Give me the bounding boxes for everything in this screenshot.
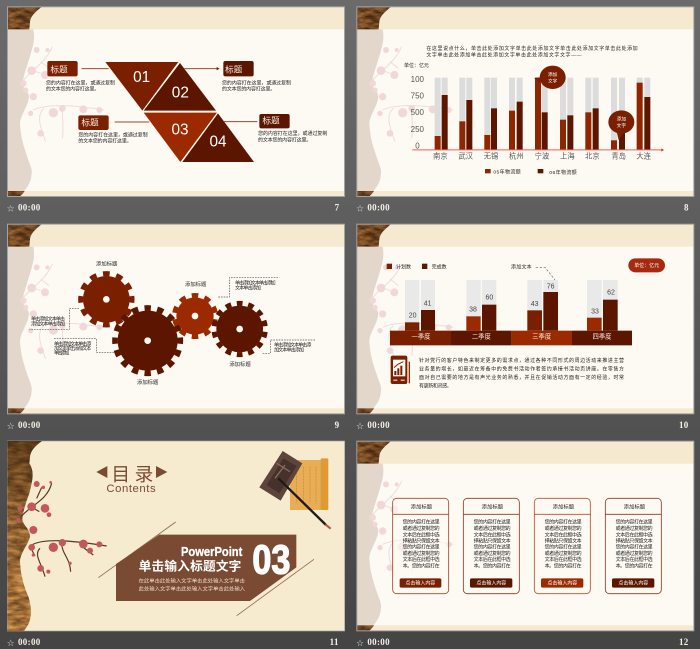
contents heading bbox=[96, 464, 167, 495]
triangle diagram: 02 bbox=[172, 85, 189, 102]
slide 7 footer: 00:00 bbox=[18, 203, 41, 213]
scroll and ink stone bbox=[259, 451, 331, 529]
note right top: 文本单击添加 bbox=[235, 284, 261, 291]
icon: phone with growth chart bbox=[391, 356, 410, 384]
gear titles: 添加标题 bbox=[137, 378, 159, 386]
banner text: 在此单击此处输入文字单击此处输入文字单击 bbox=[139, 577, 245, 585]
bar chart: 无锡 bbox=[484, 152, 498, 161]
callout 3: 标题 bbox=[81, 117, 99, 128]
slide 10 footer bbox=[356, 420, 689, 432]
bar chart: 宁波 bbox=[535, 152, 550, 161]
quarterly bar chart: 33 bbox=[591, 309, 599, 316]
card 2: 您的内容打在这里 bbox=[474, 519, 511, 526]
note left top: 单击添加文本单击 bbox=[31, 316, 65, 323]
slide 12 footer: 12 bbox=[679, 637, 689, 647]
note right bottom: 加文本单击添加 bbox=[274, 346, 304, 353]
quarterly bar chart: 20 bbox=[409, 313, 417, 320]
card 1: 添加标题 bbox=[411, 502, 433, 510]
card 4: 您的内容打在这里 bbox=[616, 544, 653, 551]
quarterly bar chart: 二季度 bbox=[472, 331, 491, 340]
callout bubble: Ningbo bbox=[534, 66, 566, 89]
card 1: 或者通过复制您的 bbox=[403, 550, 440, 557]
slide 11 footer: ☆ bbox=[7, 639, 15, 649]
note right bottom: 单击添加文本单击添 bbox=[274, 342, 311, 349]
quarterly bar chart: 60 bbox=[485, 294, 493, 301]
bar chart: 500 bbox=[411, 108, 425, 117]
chart legend bbox=[485, 169, 577, 176]
plum blossom branch bbox=[16, 481, 107, 577]
slide 9 background bbox=[7, 224, 345, 414]
card 3 bbox=[534, 498, 590, 594]
slide 8 footer bbox=[356, 203, 689, 215]
callout bubble: Ningbo: 添加 bbox=[548, 71, 558, 78]
gear 4 bbox=[214, 303, 265, 355]
unit pill: 单位：亿元 bbox=[634, 262, 659, 269]
callout 2: 的文本您的内容打这里。 bbox=[222, 86, 275, 93]
card 3: 您的内容打在这里 bbox=[545, 519, 582, 526]
card 1: 择粘贴只保留文本 bbox=[403, 538, 440, 545]
gear titles: 添加标题 bbox=[96, 260, 118, 268]
slide 7: numbered triangles bbox=[7, 7, 345, 215]
card 4: 您的内容打在这里 bbox=[616, 519, 653, 526]
quarterly bar chart: 38 bbox=[469, 307, 477, 314]
slide 12 footer: 00:00 bbox=[367, 637, 390, 647]
slide 8: bar chart bbox=[356, 7, 694, 215]
callout 2: 您的内容打在这里，或通过复制 bbox=[222, 79, 291, 86]
note right top bbox=[218, 278, 279, 297]
bar chart: 250 bbox=[411, 125, 425, 134]
callout bubble: Qingdao: 文字 bbox=[617, 122, 626, 129]
note left bottom: 单击添加文本单击添 bbox=[54, 340, 91, 347]
bar chart: 青岛 bbox=[611, 152, 626, 161]
slide 8 footer: 8 bbox=[684, 203, 689, 213]
quarterly bar chart: 一季度 bbox=[412, 331, 431, 340]
card 4: 本。您的内容打在 bbox=[616, 562, 653, 569]
callout 4: 您的内容打在这里，或通过复制 bbox=[258, 130, 327, 137]
card 4: 文本后在此框中选 bbox=[616, 556, 653, 563]
slide 11: contents bbox=[7, 441, 345, 649]
bar chart: 大连 bbox=[636, 152, 652, 161]
slide 7 footer bbox=[7, 203, 340, 215]
triangle diagram: 04 bbox=[209, 134, 227, 151]
callout 3: 的文本您的内容打这里。 bbox=[78, 138, 132, 145]
quarterly bar chart: 41 bbox=[424, 300, 432, 307]
note left top bbox=[29, 309, 79, 329]
callout 2: 标题 bbox=[225, 63, 243, 74]
annotation bbox=[511, 264, 555, 280]
triangle diagram bbox=[105, 62, 254, 162]
card 1: 或者通过复制您的 bbox=[403, 525, 440, 532]
slide 10: quarterly bars bbox=[356, 224, 694, 432]
quarterly bar chart: 四季度 bbox=[593, 331, 612, 340]
card 4: 添加标题 bbox=[624, 502, 646, 510]
bar chart: 0 bbox=[415, 142, 420, 151]
paragraph bbox=[419, 357, 624, 389]
slide 11 footer: 00:00 bbox=[18, 637, 41, 647]
slide 11 footer: 11 bbox=[330, 637, 339, 647]
rock bbox=[7, 441, 42, 631]
card 3: 或者通过复制您的 bbox=[545, 550, 582, 557]
slide 7 background bbox=[7, 7, 345, 197]
slide 8 footer: 00:00 bbox=[367, 203, 390, 213]
paragraph: 针对党行的客户特色来制定更多的需求点，通过各种不同形式的周边活动来推进主营 bbox=[419, 357, 624, 364]
callout bubble: Qingdao: 添加 bbox=[617, 115, 626, 122]
card 4: 择粘贴只保留文本 bbox=[616, 538, 653, 545]
card 2: 本。您的内容打在 bbox=[474, 562, 511, 569]
legend: 计划数 bbox=[396, 263, 411, 270]
callout 1 bbox=[46, 61, 115, 93]
banner title bbox=[139, 544, 243, 573]
callout 4 bbox=[224, 114, 327, 143]
gear titles: 添加标题 bbox=[229, 360, 251, 368]
callout 1: 标题 bbox=[50, 63, 68, 74]
card 2: 点击输入内容 bbox=[476, 579, 506, 586]
card 2: 择粘贴只保留文本 bbox=[474, 538, 511, 545]
chart legend: 05年物流额 bbox=[493, 169, 521, 176]
note left bottom: 单击添加 bbox=[54, 350, 69, 357]
slide 11 footer bbox=[7, 637, 339, 649]
triangle diagram: 01 bbox=[133, 69, 150, 86]
diagonal lines bbox=[98, 522, 314, 616]
paragraph: 有更新和灵感。 bbox=[419, 382, 452, 389]
card 2: 或者通过复制您的 bbox=[474, 525, 511, 532]
card 1 bbox=[393, 498, 449, 594]
slide 8 footer: ☆ bbox=[356, 205, 364, 215]
gear titles: 添加标题 bbox=[185, 280, 207, 288]
banner title: 单击输入标题文字 bbox=[139, 558, 241, 573]
contents heading: Contents bbox=[106, 483, 156, 495]
bar chart: 上海 bbox=[560, 152, 575, 161]
slide 9: gears bbox=[7, 224, 345, 432]
slide 11 background bbox=[7, 441, 345, 631]
slide 9 footer: 00:00 bbox=[18, 420, 41, 430]
slide 7 footer: 7 bbox=[335, 203, 340, 213]
callout 3 bbox=[78, 115, 149, 145]
card 1: 您的内容打在这里 bbox=[403, 519, 440, 526]
note left bottom bbox=[54, 339, 114, 357]
slide 12: four cards bbox=[356, 441, 694, 649]
slide 10 footer: 00:00 bbox=[367, 420, 390, 430]
gear titles bbox=[96, 260, 251, 386]
card 4: 点击输入内容 bbox=[618, 579, 648, 586]
note left top: 添加文本单击添加 bbox=[31, 320, 65, 327]
callout bubble: Ningbo: 文字 bbox=[548, 78, 558, 85]
unit label: 单位：亿元 bbox=[404, 62, 429, 69]
quarterly bar chart: 62 bbox=[607, 290, 615, 297]
slide 8 background bbox=[357, 7, 694, 197]
card 3: 本。您的内容打在 bbox=[545, 562, 582, 569]
callout 2 bbox=[184, 61, 291, 93]
bar chart: 武汉 bbox=[458, 152, 474, 161]
slide 9 footer: 9 bbox=[335, 420, 340, 430]
note left bottom: 加文本单击添加文本 bbox=[54, 345, 91, 352]
bar chart bbox=[411, 75, 664, 161]
card 2: 或者通过复制您的 bbox=[474, 550, 511, 557]
callout 1: 您的内容打在这里，或通过复制 bbox=[46, 79, 115, 86]
slide 9 footer bbox=[7, 420, 340, 432]
card 3: 文本后在此框中选 bbox=[545, 531, 582, 538]
slide 9 footer: ☆ bbox=[7, 422, 15, 432]
intro text bbox=[426, 45, 638, 59]
section number: 03 bbox=[252, 536, 290, 582]
bar chart: 100 bbox=[411, 75, 425, 84]
annotation: 添加文本 bbox=[511, 264, 532, 271]
intro text: 文字单击此处添加单击此处添加文字单击此处添加文字文字—— bbox=[426, 52, 582, 59]
card 3: 您的内容打在这里 bbox=[545, 544, 582, 551]
banner text bbox=[139, 577, 246, 592]
callout 3: 您的内容打在这里，或通过复制 bbox=[78, 131, 148, 138]
card 1: 点击输入内容 bbox=[405, 579, 435, 586]
bar chart: 北京 bbox=[585, 152, 600, 161]
quarterly bar chart: 三季度 bbox=[532, 331, 552, 340]
brown title banner bbox=[116, 535, 296, 601]
chart legend: 06年物流额 bbox=[549, 169, 577, 176]
card 3: 添加标题 bbox=[553, 502, 575, 510]
card 3: 择粘贴只保留文本 bbox=[545, 538, 582, 545]
unit pill bbox=[628, 258, 665, 272]
banner title: PowerPoint bbox=[181, 544, 243, 559]
card 4: 或者通过复制您的 bbox=[616, 550, 653, 557]
card 3: 文本后在此框中选 bbox=[545, 556, 582, 563]
card 3: 或者通过复制您的 bbox=[545, 525, 582, 532]
gear 3 bbox=[174, 295, 216, 337]
slide 12 footer bbox=[356, 637, 689, 649]
card 1: 文本后在此框中选 bbox=[403, 556, 440, 563]
callout 4: 的文本您的内容打这里。 bbox=[258, 136, 311, 143]
callout 1: 的文本您的内容打这里。 bbox=[46, 86, 99, 93]
legend bbox=[387, 263, 447, 270]
callout 4: 标题 bbox=[262, 115, 280, 126]
quarterly bar chart: 76 bbox=[547, 284, 555, 291]
card 1: 您的内容打在这里 bbox=[403, 544, 440, 551]
quarterly bar chart bbox=[390, 280, 632, 345]
card 2: 您的内容打在这里 bbox=[474, 544, 511, 551]
quarterly bar chart: 43 bbox=[531, 301, 539, 308]
banner text: 此处输入文字单击此处输入文字单击此处输入 bbox=[139, 584, 246, 592]
note right bottom bbox=[263, 340, 315, 353]
bar chart: 杭州 bbox=[509, 152, 524, 161]
card 4: 或者通过复制您的 bbox=[616, 525, 653, 532]
gear 1 bbox=[81, 274, 132, 325]
card 2 bbox=[463, 498, 519, 594]
paragraph: 业务量的增长，如最近在筹备中的免费书活动作者签约承接书活动页讲座。在零售方 bbox=[419, 366, 624, 373]
card 2: 文本后在此框中选 bbox=[474, 531, 511, 538]
card 1: 文本后在此框中选 bbox=[403, 531, 440, 538]
card 2: 文本后在此框中选 bbox=[474, 556, 511, 563]
paragraph: 面对自己需要的地方是有声光业务的熟悉，并且在促销活动方面有一定的经验，时常 bbox=[419, 374, 624, 381]
slide 12 footer: ☆ bbox=[356, 639, 364, 649]
card 1: 本。您的内容打在 bbox=[403, 562, 440, 569]
intro text: 在这里说点什么，单击此处添加文字单击此处添加文字单击此处添加文字单击此处添加 bbox=[426, 45, 638, 52]
slide 12 background bbox=[357, 441, 694, 631]
legend: 完成数 bbox=[432, 263, 447, 270]
slide 10 footer: ☆ bbox=[356, 422, 364, 432]
gear 2 bbox=[115, 308, 180, 373]
card 4: 文本后在此框中选 bbox=[616, 531, 653, 538]
bar chart: 750 bbox=[411, 92, 425, 101]
bar chart: 南京 bbox=[433, 152, 448, 161]
card 2: 添加标题 bbox=[482, 502, 504, 510]
slide 10 footer: 10 bbox=[679, 420, 689, 430]
slide 10 background bbox=[357, 224, 694, 414]
callout bubble: Qingdao bbox=[608, 110, 634, 140]
card 3: 点击输入内容 bbox=[547, 579, 577, 586]
card 4 bbox=[605, 498, 661, 594]
slide 7 footer: ☆ bbox=[7, 205, 15, 215]
triangle diagram: 03 bbox=[171, 122, 189, 139]
contents heading: 目 录 bbox=[111, 464, 153, 485]
note right top: 单击添加文本单击添加 bbox=[235, 280, 276, 287]
